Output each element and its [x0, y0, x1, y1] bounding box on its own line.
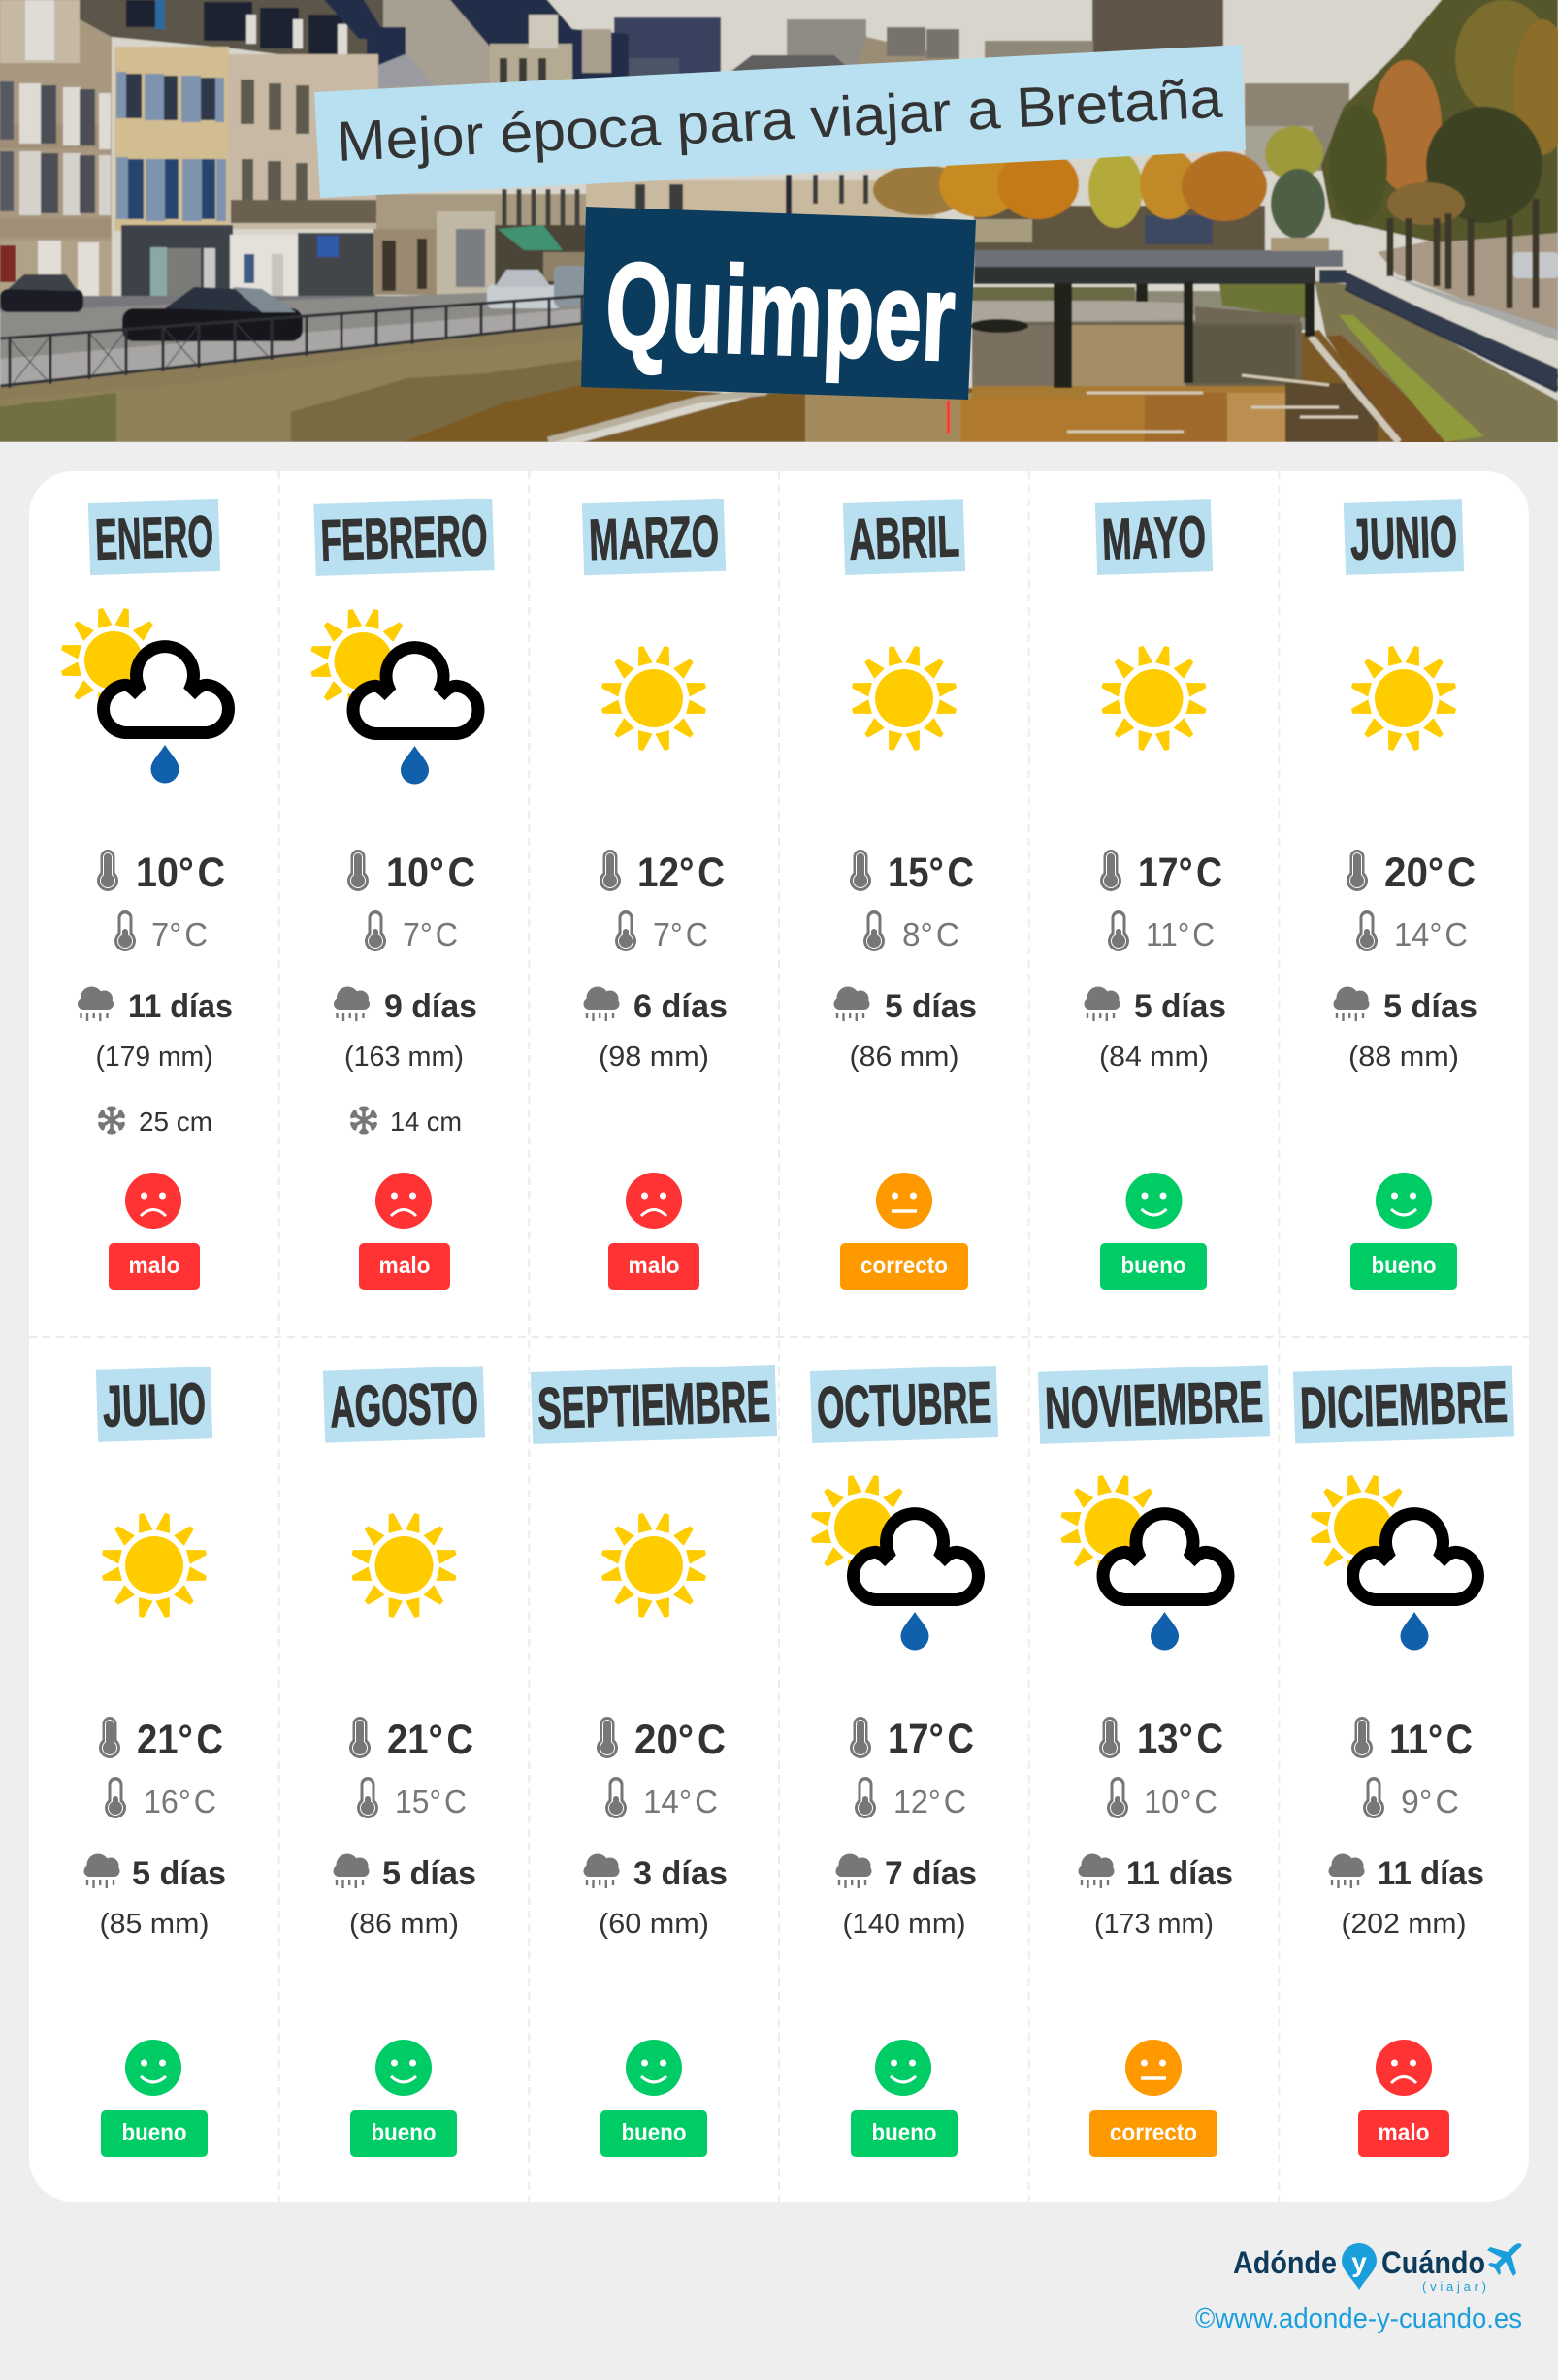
rainy days [584, 1854, 728, 1892]
min temperature: 10°C [1144, 1784, 1217, 1819]
min temperature: 7°C [151, 917, 208, 952]
min temperature: 14°C [643, 1784, 718, 1819]
heading: noviembre [1038, 1365, 1270, 1444]
rating badge [1089, 2110, 1217, 2157]
rainy days: 5 días [1383, 988, 1477, 1025]
rainfall: (85 mm) [99, 1909, 210, 1940]
rating badge [359, 1243, 450, 1290]
rating face [626, 2040, 682, 2096]
rainfall: (86 mm) [850, 1042, 958, 1073]
min temperature: 14°C [1394, 917, 1468, 952]
max temperature [99, 1717, 223, 1763]
max temperature: 10°C [136, 850, 225, 896]
heading: junio: JUNIO [1349, 503, 1458, 572]
heading: febrero [313, 499, 495, 576]
heading: septiembre [531, 1365, 777, 1444]
max temperature: 17°C [1138, 850, 1222, 896]
rating face [375, 2040, 432, 2096]
rating badge: bueno [1372, 1252, 1436, 1279]
logo: Adónde y Cuándo: (viajar) [1422, 2279, 1486, 2294]
rating badge: correcto [860, 1252, 948, 1279]
rainfall: (60 mm) [599, 1909, 709, 1940]
min temperature [605, 1777, 718, 1819]
icon: sun [350, 1512, 458, 1619]
rainfall: (86 mm) [349, 1909, 459, 1940]
rainfall: (88 mm) [1348, 1042, 1459, 1073]
min temperature [114, 910, 208, 952]
rating face [375, 1173, 432, 1229]
rating badge [1358, 2110, 1449, 2157]
rating badge [350, 2110, 457, 2157]
panel: octubre [810, 1366, 998, 2157]
min temperature [1363, 1777, 1459, 1819]
heading: enero [88, 499, 220, 575]
panel: enero [60, 499, 233, 1290]
panel: abril [834, 499, 977, 1290]
rating face [875, 2040, 931, 2096]
city banner: Quimper [603, 237, 958, 388]
rainy days [836, 1854, 977, 1892]
rainy days: 5 días [382, 1855, 476, 1892]
rating badge [851, 2110, 958, 2157]
max temperature: 21°C [387, 1717, 473, 1763]
rating badge: malo [378, 1252, 431, 1279]
logo: Adónde y Cuándo: Cuándo [1381, 2245, 1485, 2280]
max temperature: 10°C [386, 850, 475, 896]
city banner [581, 207, 976, 400]
max temperature [850, 1716, 974, 1762]
rating badge: malo [128, 1252, 180, 1279]
min temperature: 8°C [902, 917, 959, 952]
title banner: Mejor época para viajar a Bretaña [335, 67, 1224, 174]
heading: abril: ABRIL [848, 503, 960, 572]
rating face [125, 2040, 181, 2096]
min temperature: 12°C [893, 1784, 966, 1819]
heading: julio: JULIO [102, 1370, 207, 1439]
rating badge [109, 1243, 200, 1290]
rainy days [1329, 1854, 1484, 1892]
max temperature [1347, 850, 1476, 896]
max temperature: 11°C [1389, 1717, 1473, 1763]
panel: julio [83, 1367, 226, 2157]
rating face [876, 1173, 932, 1229]
rainy days [334, 987, 477, 1025]
heading: marzo [582, 499, 726, 575]
min temperature: 7°C [403, 917, 458, 952]
rainy days [1333, 987, 1477, 1025]
heading: mayo [1095, 499, 1213, 575]
panel: septiembre [531, 1365, 777, 2157]
max temperature [1100, 850, 1222, 896]
icon: plane [1487, 2243, 1522, 2276]
rating badge: malo [629, 1252, 679, 1279]
rating badge [608, 1243, 699, 1290]
max temperature [97, 850, 225, 896]
max temperature [1099, 1716, 1223, 1762]
min temperature [1107, 1777, 1217, 1819]
panel: marzo [582, 499, 728, 1290]
rainy days: 5 días [1134, 988, 1226, 1025]
panel: agosto [323, 1366, 485, 2157]
icon: sun [851, 645, 958, 752]
rating face [1125, 1173, 1182, 1229]
max temperature: 20°C [634, 1717, 726, 1763]
heading: agosto [323, 1366, 485, 1443]
icon: sun and cloud with rain [60, 607, 228, 784]
snow [97, 1106, 212, 1137]
website url: ©www.adonde-y-cuando.es [1195, 2303, 1522, 2334]
rainy days: 11 días [1378, 1855, 1484, 1892]
icon: sun [101, 1512, 208, 1619]
max temperature [1351, 1717, 1473, 1763]
max temperature: 21°C [137, 1717, 223, 1763]
rating face [125, 1173, 181, 1229]
rating badge [1350, 1243, 1457, 1290]
heading: octubre: OCTUBRE [816, 1369, 992, 1440]
heading: febrero: FEBRERO [320, 502, 489, 573]
rainy days [1085, 987, 1226, 1025]
rainfall: (202 mm) [1341, 1909, 1467, 1940]
rating badge [1100, 1243, 1207, 1290]
rating badge: bueno [871, 2119, 937, 2146]
max temperature: 20°C [1384, 850, 1476, 896]
rainy days [834, 987, 977, 1025]
max temperature: 12°C [637, 850, 725, 896]
rainfall: (179 mm) [95, 1042, 213, 1073]
min temperature [1356, 910, 1468, 952]
min temperature [615, 910, 708, 952]
min temperature [105, 1777, 216, 1819]
heading: noviembre: NOVIEMBRE [1044, 1368, 1264, 1441]
rating badge: bueno [122, 2119, 186, 2146]
rating badge [101, 2110, 208, 2157]
rainy days [1079, 1854, 1233, 1892]
icon: sun [600, 645, 707, 752]
heading: abril [843, 499, 965, 575]
min temperature: 11°C [1146, 917, 1215, 952]
rainy days [334, 1854, 476, 1892]
min temperature: 16°C [144, 1784, 216, 1819]
heading: enero: ENERO [94, 503, 214, 572]
min temperature: 7°C [653, 917, 708, 952]
logo: Adónde y Cuándo: Adónde [1233, 2245, 1337, 2280]
icon: map pin [1342, 2243, 1377, 2290]
icon: sun and cloud with rain [1059, 1474, 1228, 1651]
rainy days: 3 días [633, 1855, 728, 1892]
icon: sun [1100, 645, 1208, 752]
rating face [1376, 1173, 1432, 1229]
rainfall: (163 mm) [344, 1042, 464, 1073]
panel: junio [1333, 499, 1477, 1290]
max temperature [597, 1717, 726, 1763]
max temperature: 13°C [1137, 1716, 1223, 1762]
rainy days: 11 días [1126, 1855, 1233, 1892]
snow: 25 cm [139, 1107, 212, 1137]
heading: mayo: MAYO [1101, 503, 1207, 572]
max temperature [850, 850, 974, 896]
heading: junio [1344, 499, 1464, 575]
rainfall: (173 mm) [1094, 1909, 1214, 1940]
rating badge: correcto [1110, 2119, 1197, 2146]
min temperature: 9°C [1401, 1784, 1459, 1819]
logo: Adónde y Cuándo [1233, 2243, 1522, 2294]
min temperature [357, 1777, 467, 1819]
heading: septiembre: SEPTIEMBRE [536, 1368, 771, 1441]
rainy days: 6 días [633, 988, 728, 1025]
icon: map pin: y [1351, 2247, 1367, 2277]
icon: sun and cloud with rain [1310, 1474, 1477, 1651]
max temperature [600, 850, 725, 896]
panel: white card [29, 471, 1529, 2202]
min temperature [365, 910, 458, 952]
rainy days [83, 1854, 226, 1892]
min temperature [1108, 910, 1215, 952]
max temperature: 17°C [888, 1716, 974, 1762]
rainy days [78, 987, 233, 1025]
rating face [1125, 2040, 1182, 2096]
panel: noviembre [1038, 1365, 1270, 2157]
title banner [314, 45, 1246, 198]
rating badge: bueno [1121, 1252, 1185, 1279]
panel: diciembre [1293, 1365, 1514, 2157]
snow [349, 1106, 462, 1137]
heading: julio [96, 1367, 212, 1442]
icon: sun [600, 1512, 707, 1619]
rating face [1376, 2040, 1432, 2096]
max temperature [349, 1717, 473, 1763]
header photo: Quimper canal [0, 0, 1558, 451]
rainy days: 5 días [132, 1855, 226, 1892]
rainfall: (98 mm) [599, 1042, 709, 1073]
icon: sun [1350, 645, 1457, 752]
rainy days: 5 días [885, 988, 977, 1025]
rating badge: bueno [621, 2119, 687, 2146]
rainfall: (84 mm) [1099, 1042, 1209, 1073]
min temperature: 15°C [395, 1784, 467, 1819]
rainy days: 7 días [885, 1855, 977, 1892]
rating badge [600, 2110, 707, 2157]
heading: agosto: AGOSTO [329, 1370, 479, 1439]
icon: sun and cloud with rain [810, 1474, 978, 1651]
rating face [626, 1173, 682, 1229]
max temperature: 15°C [888, 850, 974, 896]
rainy days: 11 días [128, 988, 233, 1025]
snow: 14 cm [390, 1107, 462, 1137]
icon: sun and cloud with rain [309, 608, 478, 784]
panel: mayo [1085, 499, 1226, 1290]
rating badge [840, 1243, 968, 1290]
rainfall: (140 mm) [842, 1909, 966, 1940]
rating badge: malo [1378, 2119, 1430, 2146]
rainy days [584, 987, 728, 1025]
rating badge: bueno [371, 2119, 437, 2146]
heading: octubre [810, 1366, 998, 1443]
max temperature [347, 850, 475, 896]
min temperature [855, 1777, 966, 1819]
rainy days: 9 días [384, 988, 477, 1025]
panel: febrero [309, 499, 495, 1290]
min temperature [863, 910, 959, 952]
heading: marzo: MARZO [588, 503, 720, 572]
